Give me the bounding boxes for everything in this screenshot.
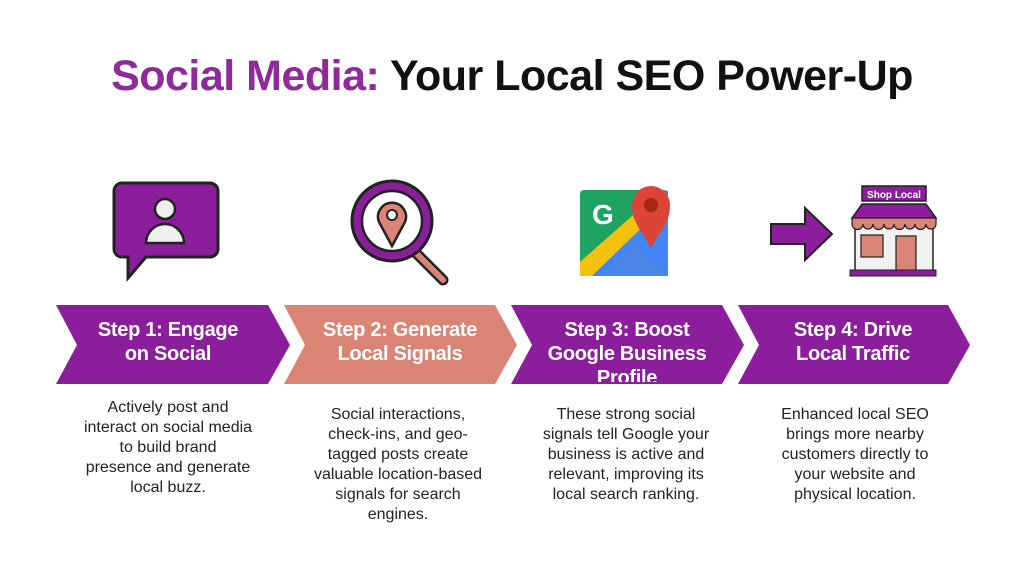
step 3 label: Step 3: Boost: [564, 319, 690, 341]
step 1 text: presence and generate: [86, 459, 250, 476]
icon: chat person: [114, 183, 218, 278]
icon: google maps: G: [592, 199, 614, 230]
step 2 label: Step 2: Generate: [323, 319, 477, 341]
step 2 text: engines.: [368, 506, 428, 523]
step 1 text: local buzz.: [130, 479, 206, 496]
step 4 text: your website and: [795, 466, 915, 483]
chevron 2: [284, 305, 517, 384]
icon: arrow: [771, 208, 832, 260]
step 2 text: [314, 406, 482, 523]
step 1 label: on Social: [125, 343, 211, 365]
step 1 label: [98, 319, 238, 365]
step 1 text: interact on social media: [84, 419, 252, 436]
step 3 text: These strong social: [557, 406, 695, 423]
step 3 text: [543, 406, 709, 503]
step 4 label: Local Traffic: [796, 343, 910, 365]
step 4 label: [794, 319, 912, 365]
icon: shop: Shop Local: [867, 190, 921, 201]
step 1 text: [84, 399, 252, 496]
step 4 label: Step 4: Drive: [794, 319, 912, 341]
chevron 3: [511, 305, 744, 384]
chevron 4: [738, 305, 970, 384]
icon: google maps: [580, 186, 670, 276]
step 1 text: to build brand: [120, 439, 216, 456]
step 1 text: Actively post and: [108, 399, 228, 416]
step 3 text: business is active and: [548, 446, 704, 463]
step 4 text: Enhanced local SEO: [781, 406, 929, 423]
step 4 text: brings more nearby: [786, 426, 924, 443]
step 2 text: check-ins, and geo-: [328, 426, 468, 443]
step 3 text: signals tell Google your: [543, 426, 709, 443]
step 3 label: [548, 319, 706, 382]
chevron 1: [56, 305, 290, 384]
step 2 text: signals for search: [335, 486, 461, 503]
step 2 label: [323, 319, 477, 365]
title: Social Media: Your Local SEO Power-Up: [111, 52, 913, 100]
step 4 text: [781, 406, 929, 503]
step 1 label: Step 1: Engage: [98, 319, 238, 341]
step 2 text: valuable location-based: [314, 466, 482, 483]
step 4 text: physical location.: [794, 486, 916, 503]
step 2 text: tagged posts create: [328, 446, 468, 463]
step 3 text: local search ranking.: [553, 486, 699, 503]
step 3 label: Google Business: [548, 343, 706, 365]
icon: magnifier pin: [352, 181, 443, 280]
step 2 text: Social interactions,: [331, 406, 465, 423]
step 4 text: customers directly to: [782, 446, 928, 463]
step 2 label: Local Signals: [337, 343, 463, 365]
step 3 text: relevant, improving its: [548, 466, 704, 483]
icon: shop: [850, 186, 936, 276]
